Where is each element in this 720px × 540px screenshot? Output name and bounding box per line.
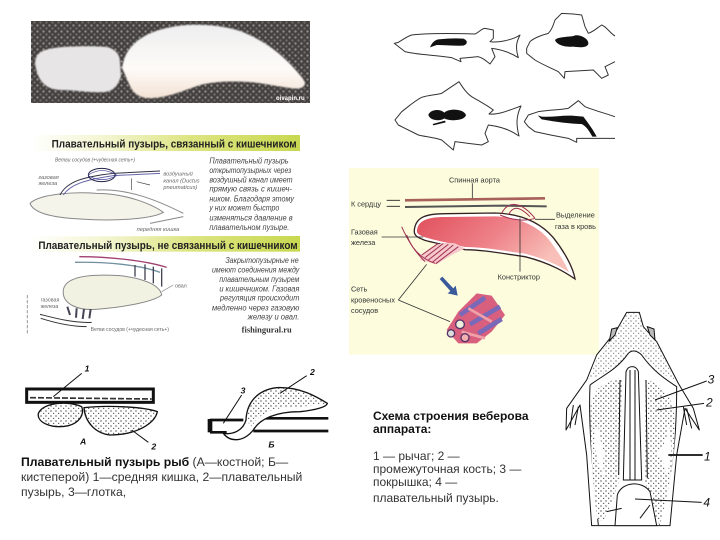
description text: Закрытопузырные не	[225, 255, 299, 265]
description text	[212, 255, 300, 322]
dorsal aorta	[405, 198, 547, 207]
description text	[208, 155, 295, 232]
description text: регуляция происходит	[219, 293, 299, 303]
description text: изменяться давление в	[209, 213, 293, 223]
stippled organs	[591, 378, 622, 522]
labels: Газовая	[351, 227, 378, 236]
diagram labels: канал (Ductus	[163, 178, 200, 184]
labels: Сеть	[351, 285, 367, 294]
heading bar	[30, 236, 300, 252]
panel: bladder drawings A and B	[27, 364, 328, 451]
fish 4	[524, 101, 615, 142]
drawing B: 3	[241, 386, 246, 396]
diagram: closed bladder	[27, 257, 173, 333]
panel: bladder connected to the gut	[30, 135, 300, 239]
fish 2	[527, 13, 615, 78]
caption: Weberian apparatus: покрышка; 4 —	[373, 475, 457, 489]
watermark: oivapin.ru	[276, 96, 305, 102]
head stippling	[588, 313, 675, 380]
caption: Weberian apparatus: плавательный пузырь.	[373, 491, 499, 505]
caption: Weberian apparatus: аппарата:	[373, 422, 431, 436]
gas gland and blood vessel network	[420, 243, 465, 264]
labels: газа в кровь	[555, 222, 596, 231]
source credit: fishingural.ru	[242, 325, 292, 334]
leader lines	[382, 183, 555, 322]
callout numbers	[635, 381, 707, 502]
caption: Weberian apparatus: 1 — рычаг; 2 —	[373, 449, 460, 463]
head and body outline	[566, 312, 699, 526]
caption: swim bladder of fish: кистеперой) 1—средняя кишка, 2—плавательный	[21, 470, 302, 484]
bladder	[414, 213, 575, 279]
panel: Weberian apparatus drawing	[566, 312, 715, 526]
panel: four fish silhouettes	[394, 13, 615, 150]
drawing A: А	[79, 436, 86, 446]
caption: swim bladder of fish: (А—костной; Б—	[189, 455, 289, 469]
description text: имеют соединения между	[212, 264, 300, 274]
description text: прямую связь с кишеч-	[209, 184, 292, 194]
labels	[351, 175, 596, 315]
panel: swim bladder photo	[31, 21, 310, 103]
labels: железа	[351, 238, 376, 247]
description text: медленно через газовую	[212, 302, 299, 312]
caption: swim bladder of fish: пузырь, 3—глотка,	[21, 485, 126, 499]
labels: Констриктор	[498, 272, 540, 281]
white cavity gaps	[594, 422, 671, 480]
diagram labels: передняя кишка	[137, 227, 179, 233]
eyes	[609, 327, 655, 341]
rear chamber of bladder	[122, 25, 305, 98]
description text: плавательном пузыре.	[209, 222, 289, 232]
caption: Weberian apparatus: Схема строения веберова	[373, 409, 529, 423]
labels: Спинная аорта	[449, 175, 501, 184]
description text: железу и овал.	[247, 312, 299, 322]
flow arrows	[387, 200, 400, 206]
diagram labels: pneumaticus)	[162, 185, 197, 191]
labels: кровеносных	[351, 295, 395, 304]
description text: Плавательный пузырь	[209, 155, 289, 165]
diagram labels: Ветви сосудов (+чудесная сеть+)	[55, 158, 135, 164]
description text: и кишечником. Газовая	[219, 283, 300, 293]
enlarged vessel cross-section	[447, 293, 505, 343]
diagram labels: Ветви сосудов (+чудесная сеть+)	[91, 327, 169, 333]
fish 3	[395, 82, 521, 150]
panel: Weberian apparatus drawing: 3	[708, 373, 715, 387]
diagram labels: газовая	[41, 298, 59, 304]
front chamber of bladder	[35, 46, 121, 92]
drawing A	[27, 364, 157, 451]
labels: сосудов	[351, 306, 378, 315]
diagram labels: овал	[175, 283, 187, 289]
body cavity	[590, 351, 677, 525]
panel: Weberian apparatus drawing: 1	[704, 449, 711, 463]
description text: воздушный канал имеет	[209, 174, 293, 184]
heading bar: Плавательный пузырь, связанный с кишечником	[52, 139, 297, 151]
drawing B: 2	[309, 367, 315, 377]
description text: плавательным пузырем	[219, 274, 300, 284]
description text: ником. Благодаря этому	[209, 193, 295, 203]
labels: К сердцу	[351, 199, 381, 208]
description text: открытопузырных через	[209, 165, 291, 175]
description text: у них может быстро	[208, 203, 280, 213]
panel: coloured diagram of physoclistous bladder	[349, 168, 599, 355]
diagram labels: железа	[41, 304, 58, 310]
caption: Weberian apparatus: промежуточная кость; 3 —	[373, 462, 521, 476]
blue arrow	[440, 277, 458, 296]
caption: swim bladder of fish: Плавательный пузырь рыб	[21, 455, 190, 469]
heading bar	[30, 135, 300, 151]
panel: bladder not connected to the gut	[27, 236, 300, 334]
diagram labels: газовая	[38, 175, 59, 181]
drawing B: Б	[268, 440, 274, 450]
drawing B	[210, 367, 328, 450]
panel: Weberian apparatus drawing: 2	[705, 395, 713, 409]
pectoral fin lines	[570, 405, 692, 428]
panel: Weberian apparatus drawing: 4	[703, 495, 710, 509]
diagram labels: воздушный	[163, 171, 194, 178]
diagram labels: железа	[37, 181, 57, 187]
diagram labels	[37, 158, 200, 233]
drawing A: 2	[150, 441, 156, 451]
spine	[619, 367, 647, 480]
swim bladder	[615, 484, 657, 526]
diagram labels	[41, 283, 187, 333]
diagram: open bladder	[30, 168, 183, 223]
labels: Выделение	[556, 211, 595, 220]
fish 1	[394, 28, 520, 64]
heading bar: Плавательный пузырь, не связанный с кишечником	[38, 240, 298, 252]
drawing A: 1	[85, 364, 90, 374]
